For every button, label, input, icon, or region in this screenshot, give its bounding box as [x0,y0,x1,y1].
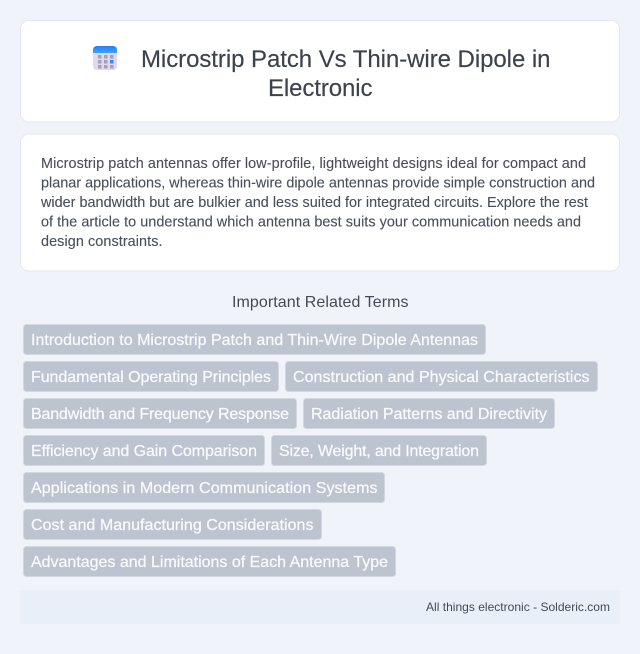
text block: summary: wider bandwidth but are bulkier and less suited for integrated circuits. Explore the rest [40,195,588,211]
tag: construction: Construction and Physical Characteristics [293,369,590,386]
tag: size: Size, Weight, and Integration [279,443,479,460]
title [141,46,550,102]
panel: title card [20,20,620,122]
text block: summary [40,156,595,250]
tag: cost: Cost and Manufacturing Considerations [31,517,314,534]
tag: size [272,436,486,466]
tag list [24,324,598,576]
tag: bandwidth: Bandwidth and Frequency Response [31,406,289,423]
text block: summary: of the article to understand which antenna best suits your communication needs and [41,214,581,230]
tag: applications [24,472,384,502]
tag: efficiency: Efficiency and Gain Comparison [31,443,257,460]
tag: advantages [24,546,396,576]
text block: summary: planar applications, whereas thin-wire dipole antennas provide simple construction and [41,176,595,192]
title: Microstrip Patch Vs Thin-wire Dipole in [141,46,550,73]
footer credit: All things electronic - Solderic.com [426,600,610,614]
tag: advantages: Advantages and Limitations of Each Antenna Type [31,554,388,571]
tag: radiation: Radiation Patterns and Directivity [311,406,547,423]
tag: radiation [304,398,554,428]
panel: summary card [20,134,620,271]
heading: important related terms: Important Related Terms [232,294,408,311]
tag: cost [24,510,322,540]
tag: principles [24,362,278,392]
tag: applications: Applications in Modern Communication Systems [31,480,378,497]
tag: bandwidth [24,398,296,428]
tag: construction [286,362,598,392]
tag: efficiency [24,436,264,466]
title: Electronic [268,75,372,102]
footer bar [20,590,620,624]
tag: principles: Fundamental Operating Principles [31,369,271,386]
text block: summary: Microstrip patch antennas offer low-profile, lightweight designs ideal for compact and [41,156,586,172]
tag: introduction [24,324,486,354]
tag: introduction: Introduction to Microstrip Patch and Thin-Wire Dipole Antennas [31,332,478,349]
icon: calendar [93,46,117,70]
text block: summary: design constraints. [41,234,162,250]
